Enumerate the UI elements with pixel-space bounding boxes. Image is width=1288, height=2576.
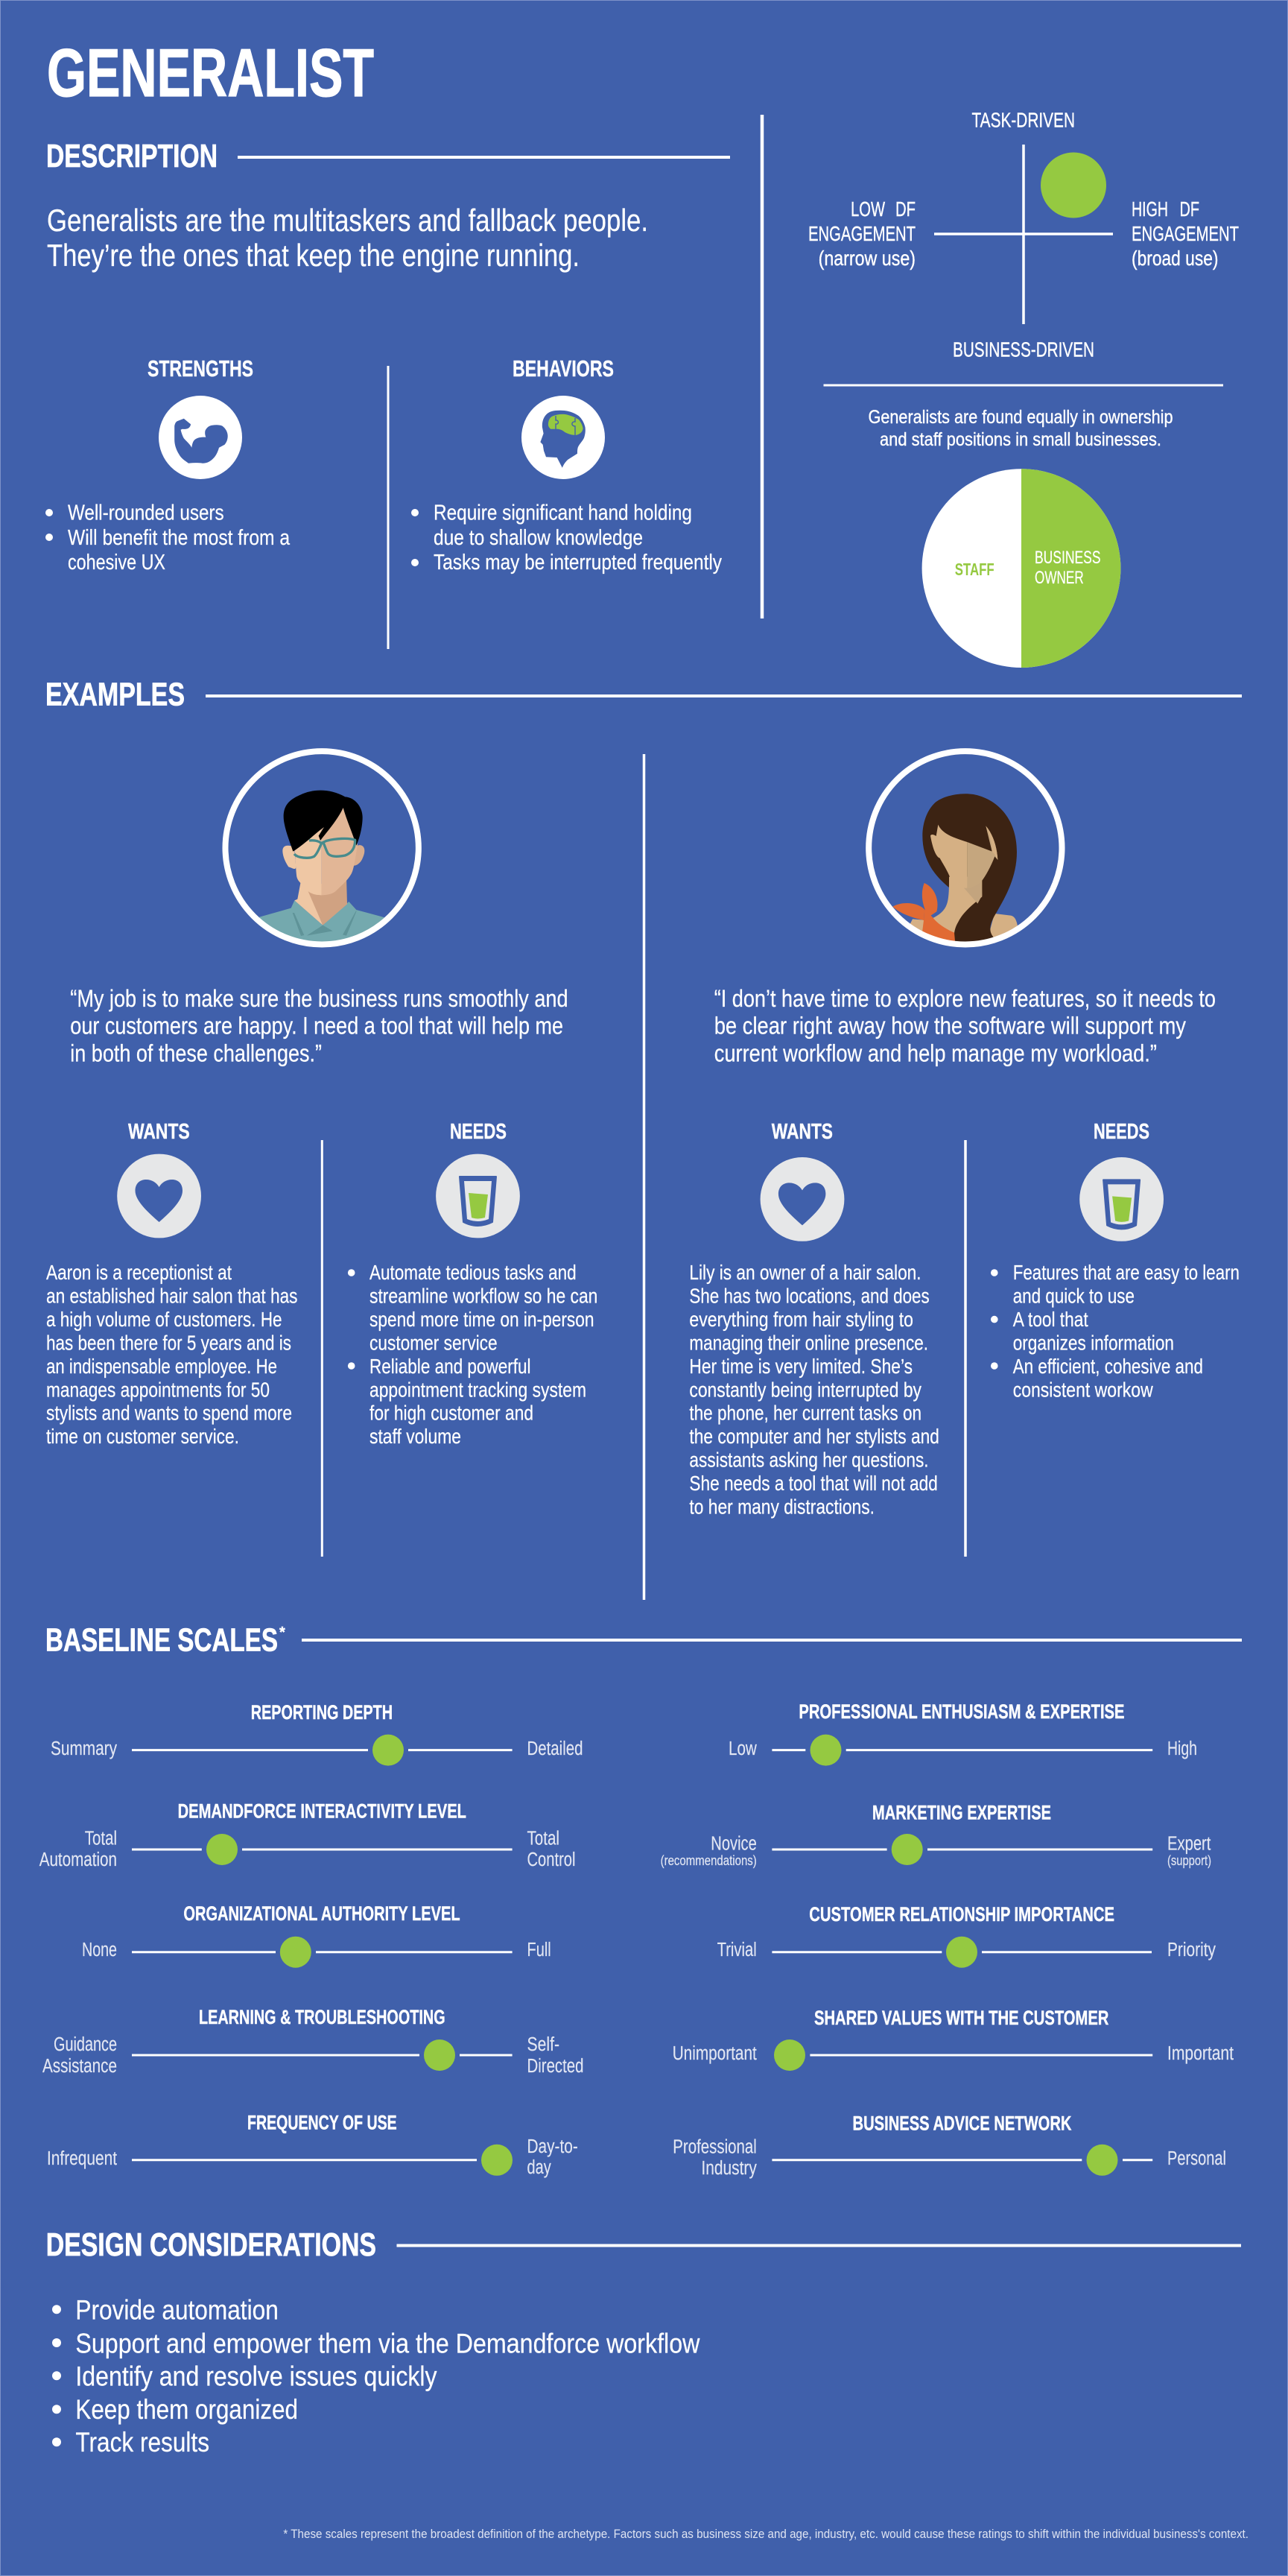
panel: strengths <box>45 355 291 575</box>
list: Aaron needs: streamline workflow so he can <box>369 1285 597 1307</box>
scale: frequency of use: Infrequent <box>47 2148 117 2169</box>
scale: demandforce interactivity level: Control <box>527 1849 575 1870</box>
axis label: high engagement: HIGH <box>1132 197 1168 221</box>
icon: heart <box>117 1154 201 1238</box>
heading: design considerations: DESIGN CONSIDERATIONS <box>46 2227 376 2263</box>
text: Aaron bio: Aaron is a receptionist at <box>46 1261 232 1284</box>
scale: professional enthusiasm and expertise: High <box>1167 1738 1197 1759</box>
scale: demandforce interactivity level: Automation <box>39 1849 117 1870</box>
scale: customer relationship importance: Trivial <box>717 1940 757 1961</box>
scale: learning and troubleshooting: Self- <box>527 2034 559 2055</box>
title: GENERALIST <box>47 36 374 111</box>
text: Lily bio: managing their online presence. <box>689 1331 928 1354</box>
list: Aaron needs <box>348 1261 597 1448</box>
list: design considerations: Identify and resolve issues quickly <box>75 2361 437 2392</box>
text: ownership note: and staff positions in small businesses. <box>880 429 1161 450</box>
panel: Lily example <box>689 751 1240 1557</box>
list: Lily needs: organizes information <box>1013 1331 1174 1354</box>
scale: shared values with the customer: Important <box>1167 2043 1234 2064</box>
marker: quadrant position <box>1041 152 1106 218</box>
text: ownership note: Generalists are found equally in ownership <box>869 407 1173 428</box>
scale: demandforce interactivity level: Total <box>527 1828 559 1849</box>
quote: Aaron: in both of these challenges.” <box>70 1039 322 1066</box>
axis label: low engagement: DF <box>895 197 916 221</box>
heading: behaviors: BEHAVIORS <box>513 355 614 382</box>
scale: professional enthusiasm and expertise: Low <box>729 1738 757 1759</box>
scale: frequency of use: day <box>527 2157 551 2178</box>
list: Aaron needs: Reliable and powerful <box>369 1355 530 1378</box>
chart: staff vs business owner pie: STAFF <box>955 560 994 579</box>
scale: frequency of use: Day-to- <box>527 2136 578 2157</box>
list: Aaron needs: appointment tracking system <box>369 1378 586 1401</box>
text: Lily bio: constantly being interrupted by <box>689 1378 921 1401</box>
list: strengths: Will benefit the most from a <box>68 526 291 550</box>
scale: learning and troubleshooting: Assistance <box>42 2056 117 2077</box>
scale: reporting depth: Summary <box>51 1738 117 1759</box>
text: Aaron bio: manages appointments for 50 <box>46 1378 270 1401</box>
scale: customer relationship importance: Priority <box>1167 1940 1216 1961</box>
scale: marketing expertise: Novice <box>711 1833 757 1854</box>
chart: engagement quadrant: TASK-DRIVEN <box>971 109 1075 132</box>
heading: Lily needs: NEEDS <box>1094 1120 1149 1144</box>
list: strengths: Well-rounded users <box>68 501 224 525</box>
scale: shared values with the customer <box>673 2007 1234 2071</box>
scale: business advice network: Professional <box>673 2136 757 2157</box>
scale: marketing expertise: (recommendations) <box>661 1853 757 1868</box>
list: behaviors: due to shallow knowledge <box>434 526 643 550</box>
text: Aaron bio: an established hair salon that has <box>46 1285 298 1307</box>
axis label: high engagement <box>1132 197 1239 270</box>
list: design considerations: Support and empower them via the Demandforce workflow <box>75 2328 700 2358</box>
scale: demandforce interactivity level: DEMANDFORCE INTERACTIVITY LEVEL <box>178 1800 466 1823</box>
chart: staff vs business owner pie: OWNER <box>1035 568 1084 588</box>
scale: organizational authority level: ORGANIZATIONAL AUTHORITY LEVEL <box>183 1902 460 1925</box>
text: ownership note <box>869 407 1173 450</box>
list: Aaron needs: Automate tedious tasks and <box>369 1261 577 1284</box>
list: Lily needs: consistent workow <box>1013 1378 1153 1401</box>
list: strengths <box>45 501 291 575</box>
text: Aaron bio: a high volume of customers. He <box>46 1308 282 1331</box>
scale: marketing expertise: MARKETING EXPERTISE <box>872 1802 1051 1824</box>
scale: reporting depth: Detailed <box>527 1738 583 1759</box>
text: Lily bio: the phone, her current tasks on <box>689 1402 921 1425</box>
text: Lily bio <box>689 1261 939 1519</box>
chart: engagement quadrant: BUSINESS-DRIVEN <box>953 338 1094 361</box>
text: Lily bio: everything from hair styling to <box>689 1308 913 1331</box>
axis label: low engagement: (narrow use) <box>819 247 916 270</box>
scale: business advice network: BUSINESS ADVICE NETWORK <box>852 2112 1071 2134</box>
quote: Lily: current workflow and help manage my workload.” <box>714 1039 1157 1066</box>
avatar: Lily <box>869 751 1062 946</box>
scale: organizational authority level: None <box>82 1940 117 1961</box>
quote: Lily: be clear right away how the software will support my <box>714 1012 1186 1039</box>
quote: Aaron <box>70 985 568 1066</box>
icon: glass <box>436 1154 520 1238</box>
list: behaviors: Tasks may be interrupted frequently <box>434 551 722 575</box>
chart: staff vs business owner pie: BUSINESS <box>1035 548 1101 568</box>
icon: head with puzzle brain <box>521 396 605 479</box>
list: design considerations <box>52 2295 700 2458</box>
text: Aaron bio: an indispensable employee. He <box>46 1355 277 1378</box>
text: Lily bio: Her time is very limited. She’s <box>689 1355 913 1378</box>
list: Aaron needs: for high customer and <box>369 1402 533 1425</box>
panel: Aaron example <box>46 751 597 1557</box>
scale: business advice network <box>673 2112 1226 2179</box>
heading: strengths: STRENGTHS <box>147 355 253 382</box>
quote: Lily <box>714 985 1216 1066</box>
scale: business advice network: Personal <box>1167 2148 1226 2169</box>
icon: glass <box>1079 1157 1164 1241</box>
scale: frequency of use <box>47 2112 578 2178</box>
axis label: high engagement: (broad use) <box>1132 247 1219 270</box>
text: Aaron bio: stylists and wants to spend more <box>46 1402 292 1425</box>
list: Aaron needs: staff volume <box>369 1425 461 1448</box>
list: Lily needs: and quick to use <box>1013 1285 1135 1307</box>
description text <box>47 203 648 273</box>
scale: business advice network: Industry <box>702 2158 757 2179</box>
scale: organizational authority level <box>82 1902 551 1968</box>
chart: staff vs business owner pie <box>922 469 1120 668</box>
axis label: low engagement <box>808 197 916 270</box>
scale: marketing expertise <box>661 1802 1211 1868</box>
heading: examples: EXAMPLES <box>45 677 185 713</box>
scale: marketing expertise: Expert <box>1167 1833 1211 1854</box>
scale: learning and troubleshooting: Directed <box>527 2056 584 2077</box>
scale: customer relationship importance: CUSTOMER RELATIONSHIP IMPORTANCE <box>809 1903 1114 1925</box>
heading: description: DESCRIPTION <box>46 139 218 174</box>
axis label: high engagement: ENGAGEMENT <box>1132 222 1239 245</box>
list: design considerations: Keep them organized <box>75 2394 298 2425</box>
scale: reporting depth: REPORTING DEPTH <box>251 1701 393 1724</box>
scale: demandforce interactivity level: Total <box>85 1828 117 1849</box>
heading: baseline scales: BASELINE SCALES <box>45 1623 278 1659</box>
scale: reporting depth <box>51 1701 583 1766</box>
description text: Generalists are the multitaskers and fallback people. <box>47 203 648 238</box>
text: Lily bio: She has two locations, and does <box>689 1285 930 1307</box>
heading: Lily wants: WANTS <box>772 1120 833 1144</box>
list: Lily needs: An efficient, cohesive and <box>1013 1355 1203 1378</box>
icon: flexed arm <box>159 396 242 479</box>
scale: organizational authority level: Full <box>527 1940 551 1961</box>
scale: customer relationship importance <box>717 1903 1216 1968</box>
axis label: low engagement: ENGAGEMENT <box>808 222 916 245</box>
text: Lily bio: to her many distractions. <box>689 1495 875 1519</box>
axis label: low engagement: LOW <box>851 197 885 221</box>
scale: demandforce interactivity level <box>39 1800 575 1870</box>
scale: frequency of use: FREQUENCY OF USE <box>247 2112 397 2134</box>
list: design considerations: Provide automation <box>75 2295 279 2326</box>
text: Lily bio: Lily is an owner of a hair salon. <box>689 1261 921 1284</box>
heading: baseline scales: * <box>279 1624 285 1641</box>
text: Aaron bio: time on customer service. <box>46 1425 239 1448</box>
list: Lily needs: A tool that <box>1013 1308 1088 1331</box>
list: behaviors: Require significant hand holding <box>434 501 692 525</box>
axis label: high engagement: DF <box>1180 197 1199 221</box>
heading: baseline scales <box>45 1623 1242 1659</box>
text: Lily bio: the computer and her stylists and <box>689 1425 939 1448</box>
list: behaviors <box>411 501 722 575</box>
avatar: Aaron <box>225 751 419 946</box>
quote: Aaron: our customers are happy. I need a tool that will help me <box>70 1012 563 1039</box>
scale: shared values with the customer: SHARED VALUES WITH THE CUSTOMER <box>814 2007 1108 2029</box>
list: Aaron needs: customer service <box>369 1331 498 1354</box>
list: Aaron needs: spend more time on in-person <box>369 1308 594 1331</box>
description text: They’re the ones that keep the engine running. <box>47 238 580 273</box>
text: Aaron bio: has been there for 5 years and is <box>46 1331 291 1354</box>
heading: Aaron wants: WANTS <box>128 1120 190 1144</box>
heading: Aaron needs: NEEDS <box>450 1120 507 1144</box>
list: design considerations: Track results <box>75 2427 209 2458</box>
list: strengths: cohesive UX <box>68 551 165 575</box>
list: Lily needs <box>991 1261 1240 1401</box>
chart: engagement quadrant <box>808 109 1239 361</box>
section: description <box>46 139 730 273</box>
scale: learning and troubleshooting <box>42 2006 584 2077</box>
scale: learning and troubleshooting: LEARNING & TROUBLESHOOTING <box>199 2006 445 2028</box>
text: Lily bio: assistants asking her questions. <box>689 1449 929 1472</box>
icon: heart <box>761 1157 844 1241</box>
scale: shared values with the customer: Unimportant <box>673 2043 757 2064</box>
panel: behaviors <box>411 355 722 575</box>
quote: Aaron: “My job is to make sure the business runs smoothly and <box>70 985 568 1012</box>
scale: professional enthusiasm and expertise: PROFESSIONAL ENTHUSIASM & EXPERTISE <box>799 1700 1125 1723</box>
text: Aaron bio <box>46 1261 298 1448</box>
scale: learning and troubleshooting: Guidance <box>54 2034 117 2055</box>
scale: professional enthusiasm and expertise <box>729 1700 1197 1766</box>
scale: marketing expertise: (support) <box>1167 1853 1211 1868</box>
text: Lily bio: She needs a tool that will not add <box>689 1472 938 1495</box>
